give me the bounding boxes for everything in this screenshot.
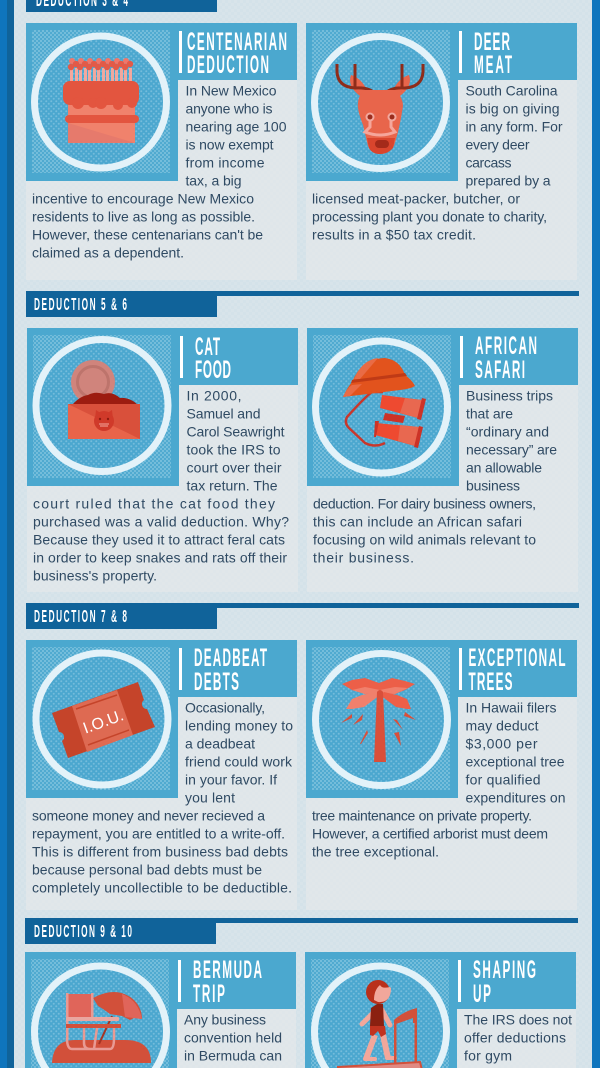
body text: the tree exceptional. [312, 844, 439, 860]
body text [32, 700, 293, 896]
right border [592, 0, 600, 1068]
panel: centenarian deduction [26, 23, 297, 280]
body text [313, 388, 557, 566]
panel: exceptional trees [306, 640, 577, 910]
title [195, 333, 231, 384]
icon: deer head [337, 64, 423, 154]
body text: for qualified [466, 772, 540, 788]
icon: beach chair and umbrella [52, 992, 151, 1063]
body text [464, 1012, 572, 1064]
body text: business [466, 478, 520, 494]
body text: results in a $50 tax credit. [312, 227, 476, 243]
body text: Carol Seawright [186, 424, 285, 440]
body text: that are [466, 406, 513, 422]
icon: birthday cake [63, 58, 139, 143]
body text: court ruled that the cat food they [33, 496, 275, 512]
section heading: deduction 7 & 8 [26, 603, 579, 629]
panel: african safari [307, 328, 578, 592]
body text [33, 388, 289, 584]
body text: In Hawaii filers [466, 700, 556, 716]
body text: In New Mexico [186, 83, 277, 99]
body text: in your favor. If [185, 772, 277, 788]
body text: The IRS does not [464, 1012, 572, 1028]
panel: deer meat [306, 23, 577, 280]
body text: completely uncollectible to be deductible. [32, 880, 292, 896]
panel: bermuda trip [25, 952, 296, 1068]
body text: someone money and never recieved a [32, 808, 265, 824]
body text: their business. [313, 550, 414, 566]
section heading: deduction 5 & 6: DEDUCTION 5 & 6 [34, 293, 127, 314]
body text: Because they used it to attract feral cats [33, 532, 285, 548]
body text: a deadbeat [185, 736, 255, 752]
left border [0, 0, 14, 1068]
title: DEER [474, 28, 510, 56]
body text: this can include an African safari [313, 514, 522, 530]
body text: In 2000, [186, 388, 242, 404]
body text [32, 83, 287, 261]
body text: nearing age 100 [186, 119, 287, 135]
body text: court over their [186, 460, 282, 476]
title: DEBTS [194, 668, 239, 696]
title [475, 332, 537, 384]
section heading: deduction 9 & 10: DEDUCTION 9 & 10 [34, 920, 132, 941]
body text: offer deductions [464, 1030, 566, 1046]
body text: Samuel and [186, 406, 260, 422]
body text: business's property. [33, 568, 157, 584]
title [474, 28, 512, 79]
body text: in any form. For [466, 119, 563, 135]
title: TREES [468, 668, 512, 696]
title [193, 956, 262, 1008]
icon: cat food can [68, 360, 140, 439]
body text: South Carolina [466, 83, 558, 99]
title: CENTENARIAN [187, 28, 287, 56]
panel: deadbeat debts [26, 640, 297, 910]
body text: tax, a big [186, 173, 242, 189]
title [473, 956, 536, 1008]
body text [312, 83, 563, 243]
section heading: deduction 7 & 8: DEDUCTION 7 & 8 [34, 605, 127, 626]
body text: However, a certified arborist must deem [312, 826, 548, 842]
icon: palm tree [341, 678, 416, 762]
body text: tax return. The [186, 478, 278, 494]
body text: expenditures on [466, 790, 566, 806]
body text: processing plant you donate to charity, [312, 209, 547, 225]
body text: because personal bad debts must be [32, 862, 262, 878]
title: EXCEPTIONAL [468, 644, 566, 672]
body text: prepared by a [466, 173, 551, 189]
body text: residents to live as long as possible. [32, 209, 255, 225]
title [187, 28, 287, 79]
body text: incentive to encourage New Mexico [32, 191, 254, 207]
title: BERMUDA [193, 956, 262, 984]
body text: for gym [464, 1048, 512, 1064]
body text: exceptional tree [466, 754, 565, 770]
body text: necessary” are [466, 442, 557, 458]
section heading: deduction 9 & 10 [25, 918, 578, 944]
body text: carcass [466, 155, 512, 171]
icon: runner on treadmill [338, 980, 422, 1068]
body text: anyone who is [186, 101, 272, 117]
title: CAT [195, 333, 220, 361]
title: AFRICAN [475, 332, 537, 360]
body text [312, 700, 566, 860]
body text: purchased was a valid deduction. Why? [33, 514, 289, 530]
body text: lending money to [185, 718, 293, 734]
title: TRIP [193, 980, 225, 1008]
panel: shaping up [305, 952, 576, 1068]
body text: in order to keep snakes and rats off their [33, 550, 287, 566]
body text: may deduct [466, 718, 539, 734]
body text: repayment, you are entitled to a write-off. [32, 826, 285, 842]
body text: took the IRS to [186, 442, 281, 458]
body text: every deer [466, 137, 530, 153]
panel: cat food [27, 328, 298, 592]
body text: from income [186, 155, 265, 171]
icon: IOU ticket: I.O.U. [81, 707, 126, 738]
body text: However, these centenarians can't be [32, 227, 263, 243]
body text: This is different from business bad debts [32, 844, 288, 860]
title: SHAPING [473, 956, 536, 984]
title: SAFARI [475, 356, 525, 384]
body text: Occasionally, [185, 700, 265, 716]
body text: is now exempt [186, 137, 274, 153]
body text: “ordinary and [466, 424, 549, 440]
body text: an allowable [466, 460, 542, 476]
body text: is big on giving [466, 101, 560, 117]
title: DEDUCTION [187, 51, 269, 79]
body text: friend could work [185, 754, 293, 770]
body text [184, 1012, 282, 1064]
body text: you lent [185, 790, 235, 806]
title: FOOD [195, 356, 231, 384]
body text: in Bermuda can [184, 1048, 282, 1064]
title [468, 644, 566, 696]
icon: safari hat and binoculars [343, 358, 426, 448]
icon: IOU ticket [52, 682, 155, 758]
title: UP [473, 980, 491, 1008]
title: DEADBEAT [194, 644, 267, 672]
body text: Any business [184, 1012, 266, 1028]
title: MEAT [474, 51, 512, 79]
section heading: deduction 5 & 6 [26, 291, 579, 317]
body text: $3,000 per [466, 736, 538, 752]
title [194, 644, 267, 696]
body text: claimed as a dependent. [32, 245, 184, 261]
body text: tree maintenance on private property. [312, 808, 532, 824]
body text: licensed meat-packer, butcher, or [312, 191, 520, 207]
body text: convention held [184, 1030, 282, 1046]
section heading: deduction 3 & 4 [26, 0, 217, 12]
body text: deduction. For dairy business owners, [313, 496, 536, 512]
body text: Business trips [466, 388, 553, 404]
body text: focusing on wild animals relevant to [313, 532, 536, 548]
